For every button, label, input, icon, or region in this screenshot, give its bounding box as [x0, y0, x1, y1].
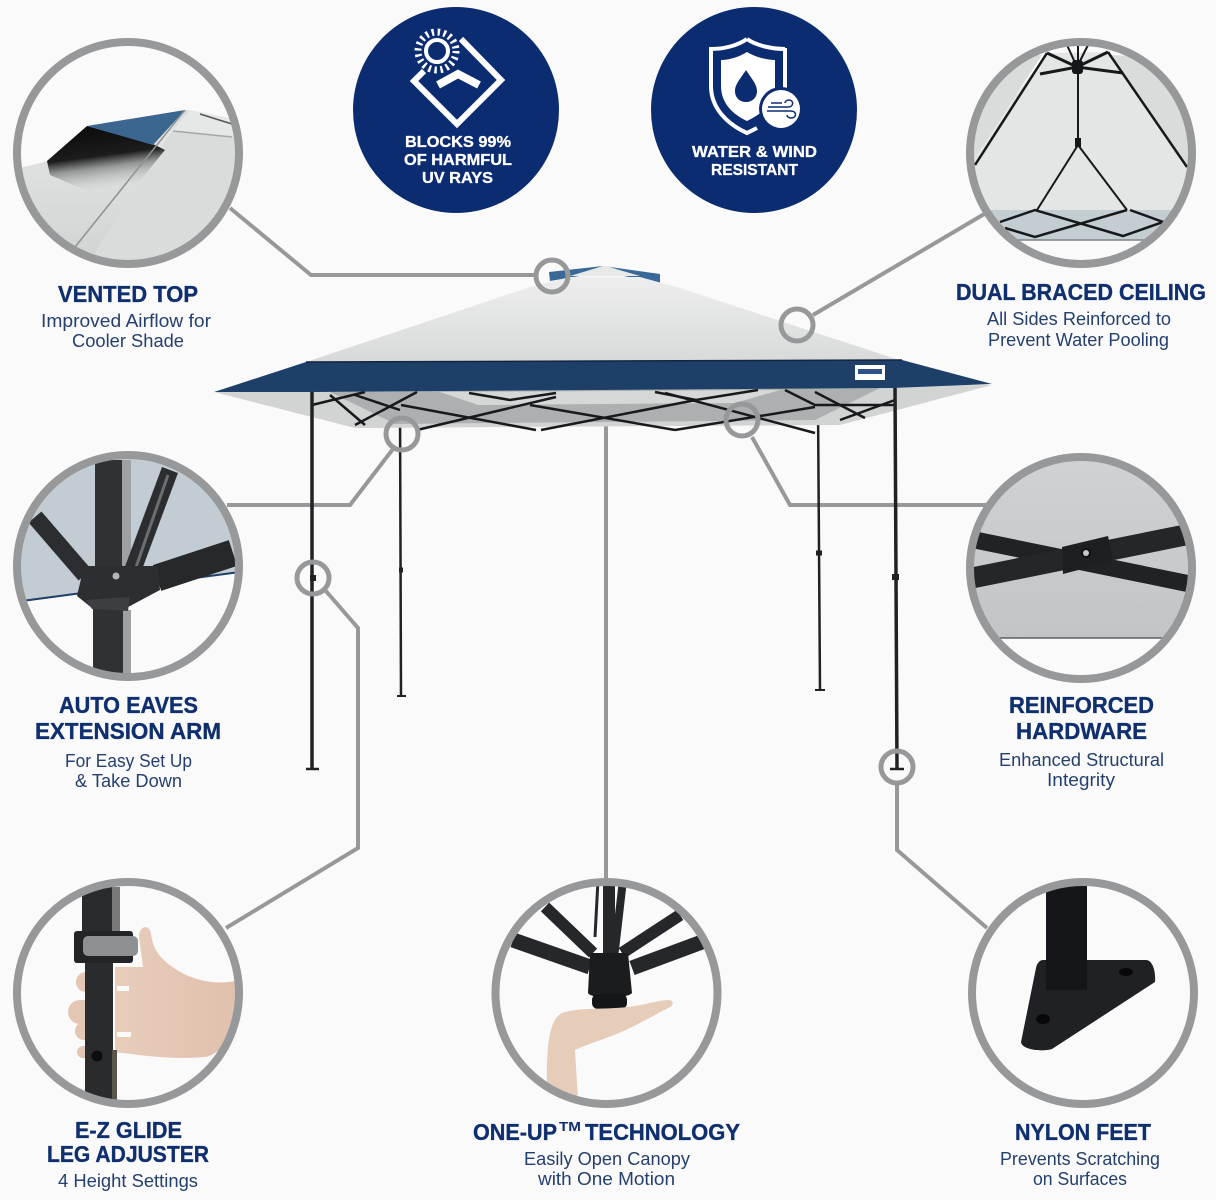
heading and text: EXTENSION ARM [35, 718, 221, 744]
heading and text: with One Motion [537, 1169, 675, 1189]
heading and text: NYLON FEET [1015, 1119, 1151, 1145]
icon: shield with drop and wind [711, 39, 803, 133]
roof [306, 277, 902, 362]
heading and text [473, 1119, 740, 1189]
panel: one-up technology [473, 878, 740, 1189]
heading and text: All Sides Reinforced to [987, 309, 1171, 329]
heading and text [41, 281, 211, 351]
heading and text [1000, 1119, 1160, 1189]
badge: water and wind [651, 7, 857, 213]
badge text: BLOCKS 99% [405, 134, 511, 151]
heading and text: on Surfaces [1033, 1169, 1127, 1189]
heading and text: Cooler Shade [72, 331, 184, 351]
heading and text: REINFORCED [1009, 692, 1154, 718]
valance [214, 360, 992, 392]
callout markers [297, 260, 913, 783]
heading and text: AUTO EAVES [59, 692, 198, 718]
back and front legs [397, 405, 825, 696]
heading and text: Improved Airflow for [41, 311, 211, 331]
photo: ceiling frame [974, 46, 1188, 241]
heading and text: & Take Down [75, 771, 182, 791]
heading and text: 4 Height Settings [58, 1171, 198, 1191]
badge: UV [353, 7, 559, 213]
photo: scissor joint [974, 461, 1188, 639]
heading and text: VENTED TOP [58, 281, 198, 307]
heading and text: For Easy Set Up [65, 751, 192, 771]
panel: e-z glide leg adjuster [13, 878, 243, 1191]
heading and text: ONE-UP [473, 1119, 557, 1145]
logo tag [855, 365, 885, 380]
heading and text [956, 279, 1206, 350]
heading and text [999, 692, 1164, 790]
heading and text: TM [559, 1119, 581, 1134]
photo: hand on leg adjuster [68, 887, 235, 1100]
heading and text: Prevent Water Pooling [988, 330, 1169, 350]
panel: vented top [13, 38, 245, 351]
leader lines [226, 208, 990, 928]
badge text: RESISTANT [711, 162, 798, 179]
heading and text: Prevents Scratching [1000, 1149, 1160, 1169]
photo: hand lifting hub [510, 886, 704, 1096]
canopy underside [214, 385, 992, 428]
badge text [404, 134, 512, 187]
heading and text [47, 1117, 209, 1191]
panel: dual braced ceiling [956, 38, 1206, 350]
photo: vent closeup [22, 110, 235, 260]
vent flap [549, 266, 660, 283]
photo: foot plate [1021, 886, 1156, 1050]
heading and text: LEG ADJUSTER [47, 1141, 209, 1167]
badge text: UV RAYS [422, 170, 493, 187]
panel: auto eaves extension arm [13, 451, 243, 791]
heading and text: Integrity [1047, 770, 1115, 790]
panel: reinforced hardware [966, 453, 1196, 790]
heading and text: Easily Open Canopy [524, 1149, 690, 1169]
panel: nylon feet [968, 878, 1198, 1189]
heading and text [35, 692, 221, 791]
badge text [692, 144, 817, 179]
heading and text: TECHNOLOGY [585, 1119, 740, 1145]
photo: joint closeup [21, 459, 235, 673]
heading and text: HARDWARE [1016, 718, 1147, 744]
truss frame [312, 390, 895, 433]
heading and text: E-Z GLIDE [75, 1117, 182, 1143]
icon: sun and canopy diamond [414, 32, 501, 124]
heading and text: Enhanced Structural [999, 750, 1164, 770]
heading and text: DUAL BRACED CEILING [956, 279, 1206, 305]
badge text: WATER & WIND [692, 144, 817, 161]
canopy tent [214, 266, 992, 769]
badge text: OF HARMFUL [404, 152, 512, 169]
front legs [306, 385, 904, 769]
